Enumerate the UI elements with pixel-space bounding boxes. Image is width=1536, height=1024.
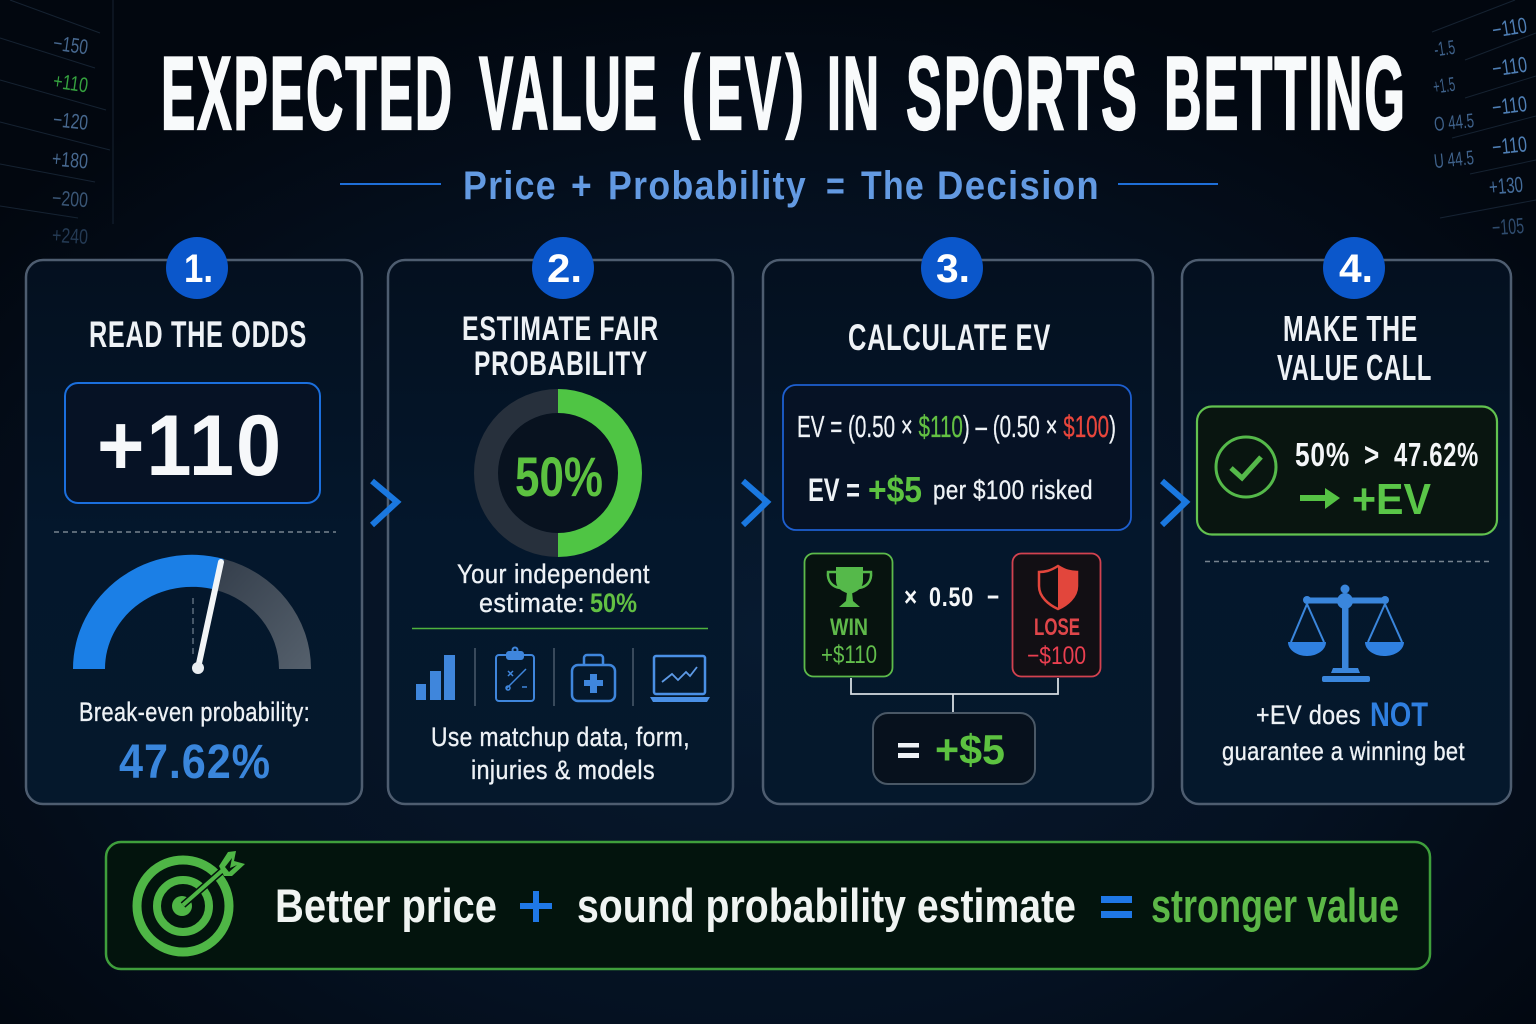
panel: calculate ev (763, 237, 1153, 804)
icon: clipboard (496, 648, 534, 701)
plus sign (520, 891, 552, 922)
subtitle: = (826, 164, 846, 208)
verdict box: +EV (1352, 475, 1432, 524)
bottom banner: sound probability estimate (577, 879, 1076, 932)
odds ticker left: −150 (52, 32, 89, 59)
donut chart 50% (474, 389, 642, 557)
break-even value: 47.62% (119, 736, 271, 789)
caveat text: guarantee a winning bet (1222, 736, 1465, 766)
arrow 2 (743, 481, 767, 525)
step badge 2: 2. (547, 247, 582, 291)
subtitle: + (571, 164, 593, 208)
step badge 1 (166, 237, 228, 299)
title: VALUE (479, 36, 659, 152)
odds ticker left: −200 (51, 187, 89, 212)
independent estimate text: estimate: (479, 588, 585, 618)
bottom banner: Better price (275, 879, 497, 932)
heading: make the value call (1277, 308, 1432, 388)
title (161, 36, 1407, 152)
subtitle: Price (463, 164, 557, 208)
independent estimate text: Your independent (457, 559, 650, 589)
panel: read the odds (26, 237, 362, 804)
icon: balance scale (1288, 584, 1404, 682)
heading: read the odds: READ THE ODDS (89, 314, 307, 355)
odds ticker right: +1.5 (1432, 74, 1457, 99)
independent estimate text: 50% (590, 588, 637, 618)
donut chart 50%: 50% (515, 445, 603, 508)
title: ) (786, 38, 806, 140)
icon: check circle (1216, 437, 1276, 497)
break-even label: Break-even probability: (79, 697, 310, 727)
formula box: +$5 (868, 469, 922, 510)
arrow 1 (372, 481, 397, 525)
title: EXPECTED (161, 36, 454, 152)
step badge 4: 4. (1339, 247, 1373, 291)
odds ticker left: +180 (51, 147, 89, 174)
formula box: per $100 risked (933, 475, 1093, 505)
multiply text: × (904, 582, 918, 612)
data sources text: Use matchup data, form, (431, 722, 690, 752)
icon: shield (1039, 566, 1077, 609)
gauge (73, 555, 311, 674)
odds ticker left: +110 (52, 70, 89, 97)
odds ticker left: +240 (51, 224, 89, 249)
multiply text (904, 582, 1000, 612)
step badge 3 (921, 237, 983, 299)
arrow 3 (1162, 481, 1186, 525)
step badge 4 (1323, 237, 1385, 299)
odds ticker right: O 44.5 (1433, 110, 1475, 136)
heading: estimate fair probability (462, 310, 659, 383)
odds ticker right: -1.5 (1433, 37, 1457, 61)
subtitle: The (861, 164, 925, 208)
win card: WIN (830, 614, 868, 641)
heading: make the value call: MAKE THE (1283, 308, 1418, 349)
caveat text: NOT (1370, 696, 1428, 734)
step badge 3: 3. (936, 247, 970, 291)
lose card: −$100 (1027, 642, 1086, 670)
panel: estimate fair probability (388, 237, 733, 804)
title: ( (682, 38, 702, 140)
odds box (65, 383, 320, 503)
formula box (783, 385, 1131, 530)
icon: trophy (828, 567, 871, 607)
title: EV (707, 36, 783, 152)
heading: make the value call: VALUE CALL (1277, 347, 1432, 388)
step badge 1: 1. (184, 247, 213, 291)
formula box: EV = (0.50 × $110) – (0.50 × $100) (797, 409, 1116, 444)
step badge 2 (532, 237, 594, 299)
bottom banner: stronger value (1151, 879, 1399, 932)
icon: target with arrow (137, 851, 245, 952)
icon: bar chart (416, 655, 455, 700)
verdict box (1197, 406, 1497, 534)
odds ticker left (0, 0, 113, 249)
multiply text: 0.50 (929, 582, 974, 612)
heading: calculate ev: CALCULATE EV (848, 317, 1051, 358)
heading: estimate fair probability: ESTIMATE FAIR (462, 310, 659, 348)
subtitle (340, 164, 1218, 208)
odds box: +110 (97, 398, 283, 494)
caveat text: +EV does (1256, 700, 1361, 730)
win card: +$110 (821, 641, 877, 669)
lose card: LOSE (1034, 614, 1080, 641)
multiply text: − (987, 582, 1000, 612)
icon: laptop chart (650, 656, 710, 702)
verdict box: 47.62% (1394, 436, 1479, 473)
heading: estimate fair probability: PROBABILITY (474, 345, 648, 383)
formula box: EV = (808, 472, 860, 508)
win card (804, 554, 892, 676)
panel: make the value call (1182, 237, 1511, 804)
bottom banner (106, 842, 1430, 969)
odds ticker left: −120 (52, 108, 89, 135)
equals sign (1101, 896, 1132, 918)
lose card (1012, 554, 1100, 676)
title: IN (827, 36, 881, 152)
result box (873, 713, 1035, 784)
odds ticker right (1432, 0, 1536, 240)
odds ticker right: U 44.5 (1433, 147, 1475, 173)
independent estimate text (457, 559, 650, 618)
data sources text (431, 722, 690, 785)
data sources text: injuries & models (471, 755, 655, 785)
icon: medical bag (572, 655, 615, 701)
caveat text (1222, 696, 1465, 766)
verdict box: > (1364, 436, 1380, 473)
title: SPORTS (906, 36, 1139, 152)
subtitle: Probability (608, 164, 807, 208)
verdict box: 50% (1295, 436, 1350, 473)
result box: +$5 (935, 726, 1005, 773)
subtitle: Decision (937, 164, 1100, 208)
arrow icon (1300, 488, 1340, 509)
